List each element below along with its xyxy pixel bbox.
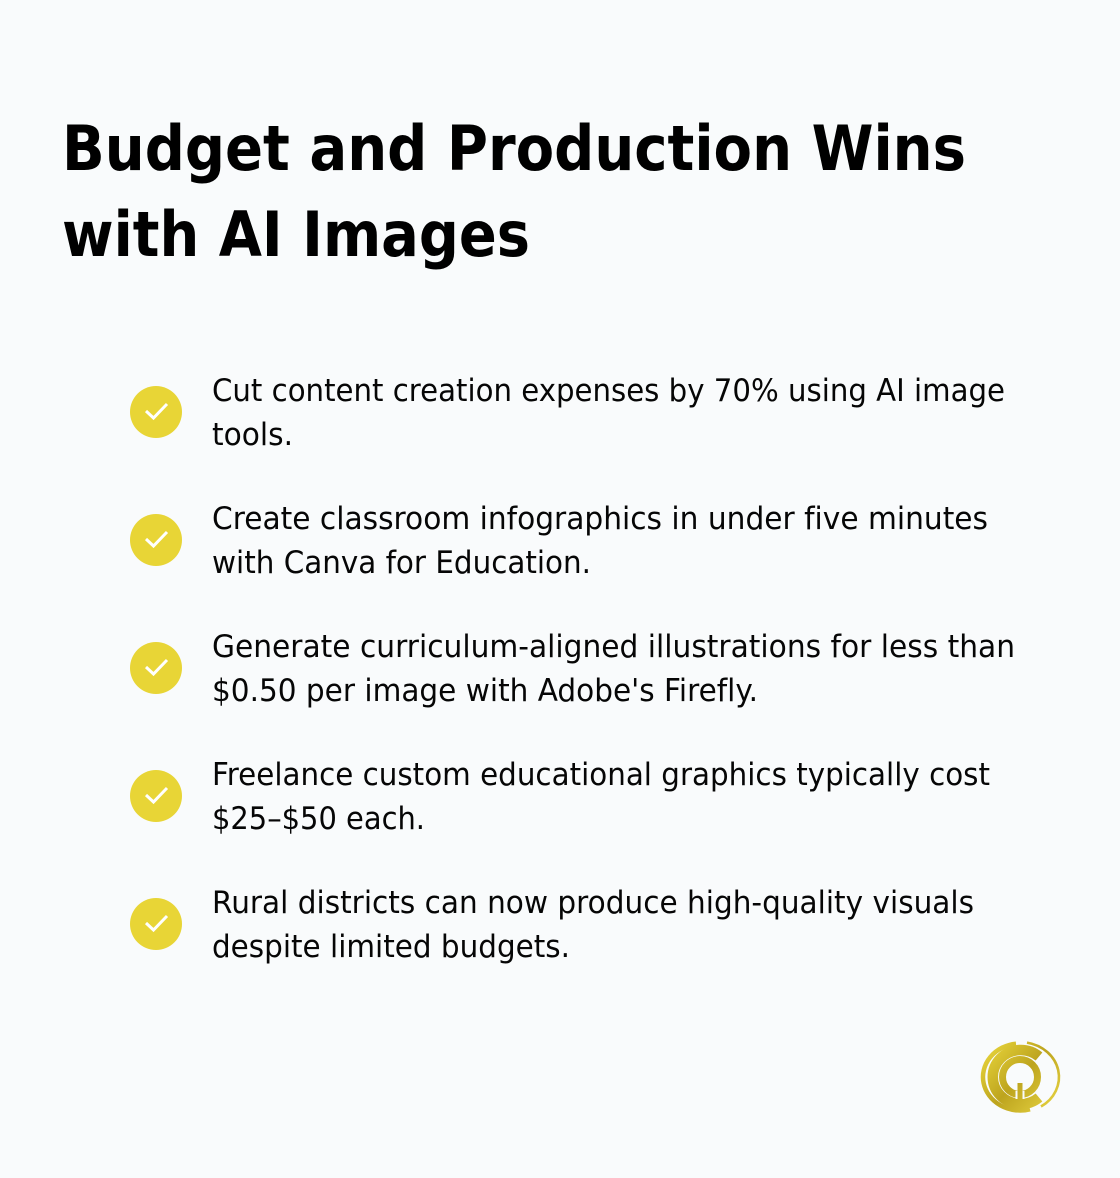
list item 3 — [130, 629, 1015, 709]
icon: check badge 5 — [130, 898, 182, 950]
icon: check badge 3 — [130, 642, 182, 694]
icon: check badge 4 — [130, 770, 182, 822]
list item 1 — [130, 373, 1005, 453]
text: item 4: Freelance custom educational graphics typically cost — [212, 757, 990, 793]
text: item 3: $0.50 per image with Adobe's Firefly. — [212, 673, 758, 709]
text: item 4: $25–$50 each. — [212, 801, 425, 837]
list item 2 — [130, 501, 988, 581]
text: item 2: Create classroom infographics in under five minutes — [212, 501, 988, 537]
list item 5 — [130, 885, 974, 965]
title — [62, 112, 966, 271]
text: item 2: with Canva for Education. — [212, 545, 591, 581]
icon: check badge 1 — [130, 386, 182, 438]
text: item 3: Generate curriculum-aligned illustrations for less than — [212, 629, 1015, 665]
title: with AI Images — [62, 198, 530, 271]
title: Budget and Production Wins — [62, 112, 966, 185]
text: item 1: tools. — [212, 417, 293, 453]
text: item 1: Cut content creation expenses by 70% using AI image — [212, 373, 1005, 409]
text: item 5: Rural districts can now produce high-quality visuals — [212, 885, 974, 921]
icon: gold logo — [983, 1043, 1059, 1110]
list item 4 — [130, 757, 990, 837]
text: item 5: despite limited budgets. — [212, 929, 570, 965]
icon: check badge 2 — [130, 514, 182, 566]
